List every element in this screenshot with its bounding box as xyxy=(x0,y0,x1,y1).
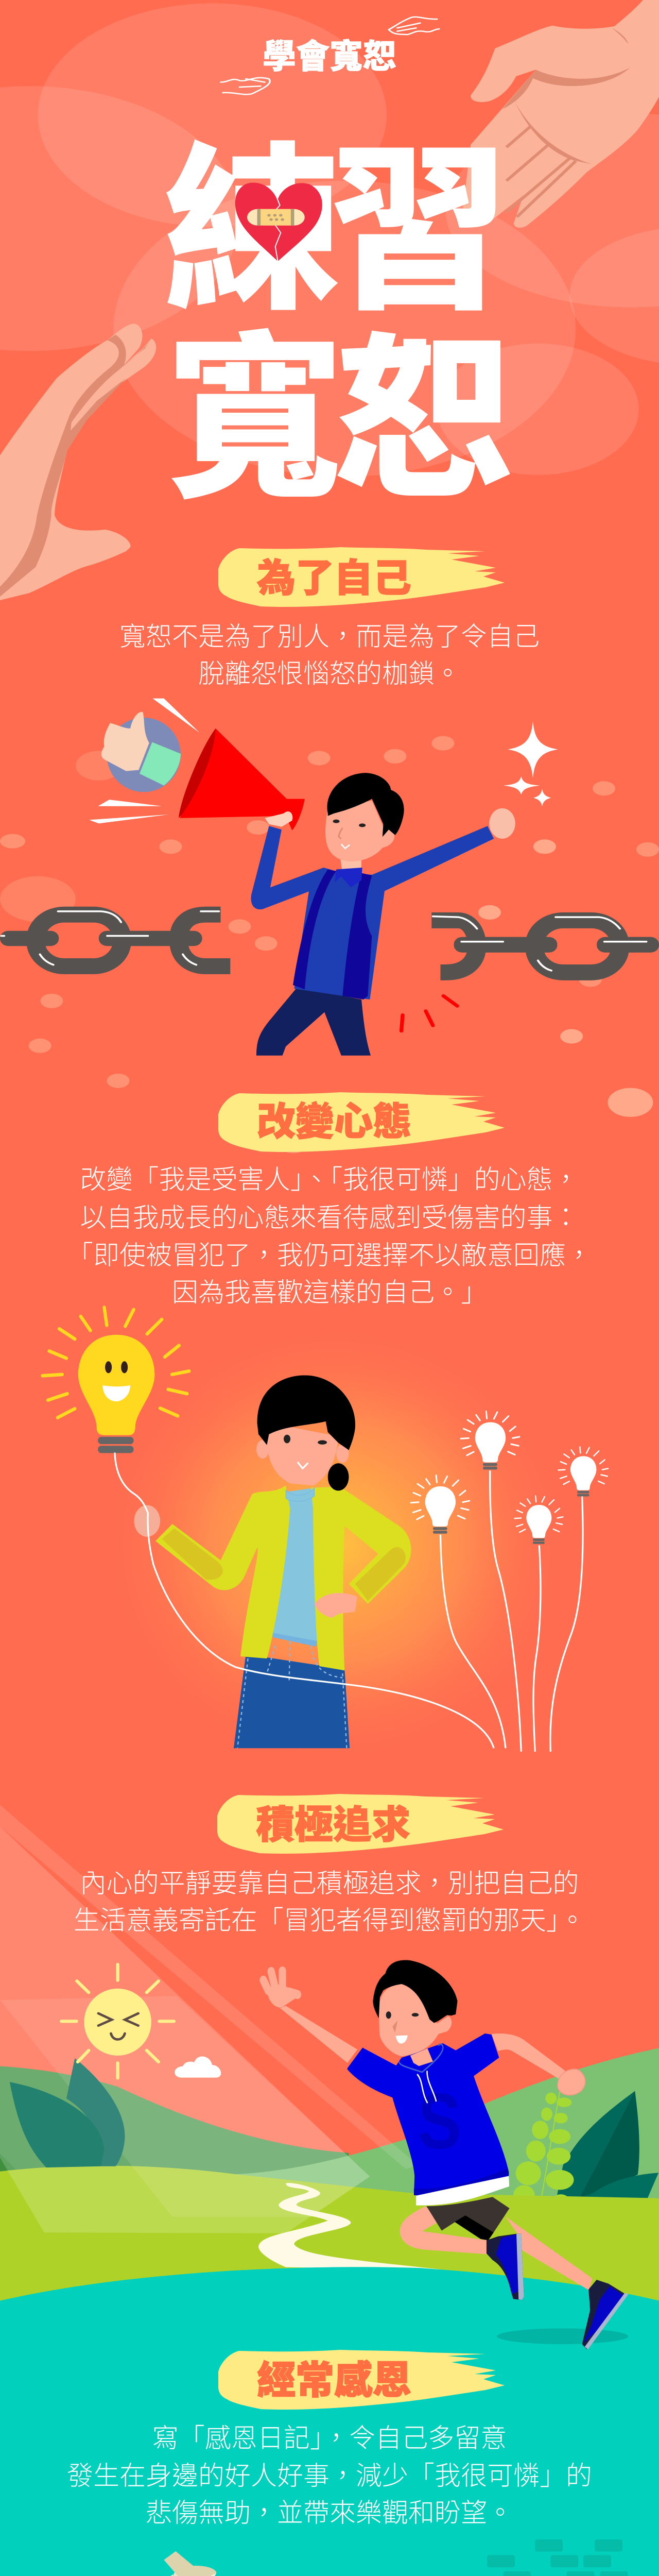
text block xyxy=(67,2424,592,2528)
text block: 「即使被冒犯了，我仍可選擇不以敵意回應， xyxy=(67,1241,592,1270)
teal ground xyxy=(0,2267,659,2421)
text block: 發生在身邊的好人好事，減少「我很可憐」的 xyxy=(67,2461,592,2490)
panel: section 1 為了自己 xyxy=(0,547,659,1088)
text block: 以自我成長的心態來看待感到受傷害的事： xyxy=(80,1203,579,1232)
wire from big bulb xyxy=(115,1453,494,1748)
text block xyxy=(67,1165,592,1307)
heading banner xyxy=(217,1794,504,1854)
teal page lower area xyxy=(0,2318,659,2576)
text block xyxy=(74,1869,585,1935)
chain left xyxy=(0,911,230,966)
text block: 內心的平靜要靠自己積極追求，別把自己的 xyxy=(80,1869,579,1898)
chain right xyxy=(431,917,659,972)
right leaves and sprig xyxy=(513,2091,658,2208)
icon: thumbs-up bubble xyxy=(101,712,181,792)
text block xyxy=(119,622,540,688)
light rays xyxy=(0,1805,418,2233)
illustration: woman with yellow cardigan xyxy=(134,1375,411,1748)
text block: 因為我喜歡這樣的自己。」 xyxy=(172,1278,487,1307)
panel: section 2 改變心態 xyxy=(42,1088,653,1765)
heading banner: 經常感恩 xyxy=(257,2359,411,2402)
text block: 悲傷無助，並帶來樂觀和盼望。 xyxy=(146,2498,513,2528)
heading banner xyxy=(218,547,505,607)
illustration: running boy xyxy=(263,1960,629,2349)
landscape xyxy=(0,1805,659,2421)
winding path xyxy=(258,2183,445,2270)
brick pattern xyxy=(239,2539,628,2576)
heading banner xyxy=(218,1092,505,1152)
text block: 寬恕不是為了別人，而是為了令自己 xyxy=(119,622,540,651)
icon: cloud xyxy=(175,2057,221,2078)
header background blobs xyxy=(0,3,659,477)
text block: 脫離怨恨惱怒的枷鎖。 xyxy=(198,659,461,688)
text block: 寫「感恩日記」，令自己多留意 xyxy=(152,2424,507,2453)
icon: small hand top xyxy=(389,17,439,35)
desk lamp xyxy=(91,2551,216,2576)
heading: 學會寬恕: 學會寬恕 xyxy=(263,38,396,75)
icon: bandaged heart xyxy=(235,182,322,261)
text block: 改變「我是受害人」、「我很可憐」的心態， xyxy=(80,1165,579,1194)
heading banner: 積極追求 xyxy=(256,1803,410,1846)
icon: sparkles xyxy=(503,721,558,806)
icon: smiling light bulb xyxy=(42,1308,189,1453)
icon: small white bulbs xyxy=(411,1411,608,1544)
icon: speed lines xyxy=(89,699,200,823)
illustration: man xyxy=(251,773,515,1056)
icon: sun with face xyxy=(61,1964,174,2078)
illustration: running boy: S xyxy=(418,2077,461,2165)
icon: reaching hand top right xyxy=(462,0,659,228)
left leaves xyxy=(10,2058,125,2167)
heading banner xyxy=(218,2350,505,2410)
title: 練習: 練習 xyxy=(163,131,508,331)
icon: megaphone xyxy=(179,728,305,831)
panel: section 3 積極追求 xyxy=(0,1794,659,2576)
glow behind woman xyxy=(101,1088,653,1765)
wires xyxy=(440,1470,583,1752)
heading banner: 改變心態 xyxy=(257,1100,411,1143)
heading banner: 為了自己 xyxy=(257,556,411,600)
icon: reaching hand bottom left xyxy=(0,324,156,600)
panel: section 4 經常感恩 xyxy=(29,2350,639,2576)
title: 寬恕: 寬恕 xyxy=(166,321,514,521)
icon: impact strokes xyxy=(402,996,457,1031)
icon: small hand bottom xyxy=(221,78,270,94)
text block: 生活意義寄託在「冒犯者得到懲罰的那天」。 xyxy=(74,1906,585,1935)
panel: header xyxy=(0,0,659,600)
background dots xyxy=(0,736,659,1088)
